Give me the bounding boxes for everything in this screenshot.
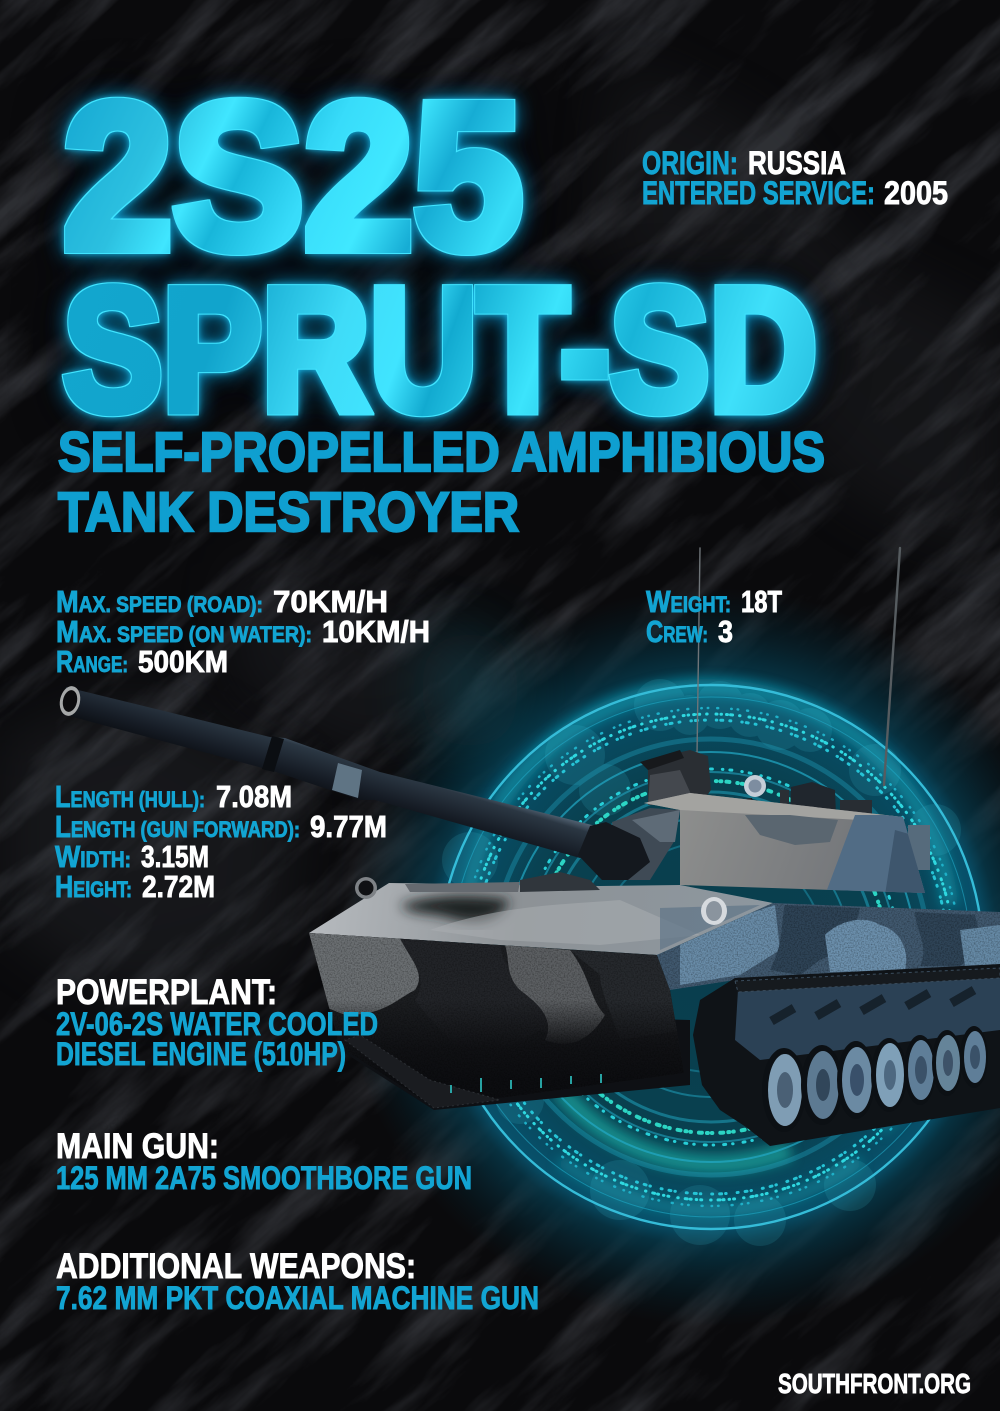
- additional weapons: 7.62 MM PKT COAXIAL MACHINE GUN: [56, 1280, 539, 1316]
- hull front plate with camouflage: [309, 933, 677, 1098]
- bokeh circles: [442, 679, 984, 1246]
- main gun: MAIN GUN:: [56, 1127, 219, 1166]
- weight and crew specs: 18T: [741, 584, 782, 619]
- dimensions specs: 7.08M: [216, 779, 292, 814]
- radar circle glow behind tank: [341, 587, 1000, 1327]
- tank illustration: [57, 548, 1000, 1146]
- powerplant: 2V-06-2S WATER COOLED: [56, 1006, 378, 1042]
- gun mantlet: [578, 822, 650, 880]
- lower hull shadow: [340, 1010, 690, 1110]
- origin and service info: 2005: [884, 175, 948, 211]
- title: 2S25 SPRUT-SD: 2S25: [63, 61, 523, 293]
- powerplant: POWERPLANT:: [56, 973, 277, 1012]
- antennas: [697, 548, 900, 785]
- subtitle: SELF-PROPELLED AMPHIBIOUS: [58, 420, 825, 483]
- weight and crew specs: 3: [718, 614, 733, 649]
- dimensions specs: 9.77M: [310, 809, 387, 844]
- subtitle: TANK DESTROYER: [58, 480, 519, 543]
- concentric rings: [439, 685, 983, 1229]
- title: 2S25 SPRUT-SD: SPRUT-SD: [63, 253, 817, 448]
- rear box: [908, 825, 930, 870]
- blurred teal bands: [467, 687, 955, 1210]
- hull side with camouflage: [657, 903, 1000, 990]
- speed and range specs: MAX. SPEED (ROAD):: [56, 584, 263, 619]
- subtitle: [58, 420, 825, 543]
- weight and crew specs: CREW:: [646, 614, 708, 649]
- additional weapons: ADDITIONAL WEAPONS:: [56, 1247, 416, 1286]
- dimensions specs: LENGTH (GUN FORWARD):: [55, 809, 300, 844]
- teal glints under hull: [450, 1074, 602, 1093]
- speed and range specs: RANGE:: [56, 644, 128, 679]
- dimensions specs: HEIGHT:: [55, 869, 132, 904]
- speed and range specs: 70KM/H: [273, 584, 388, 619]
- main gun: 125 MM 2A75 SMOOTHBORE GUN: [56, 1160, 472, 1196]
- main gun: [56, 1127, 472, 1196]
- road wheels: [762, 1026, 988, 1132]
- dimensions specs: 3.15M: [141, 839, 209, 874]
- gun barrel: [57, 684, 606, 858]
- dimensions specs: WIDTH:: [55, 839, 131, 874]
- speed and range specs: 500KM: [138, 644, 228, 679]
- left track under hull: [345, 1035, 500, 1108]
- origin and service info: ORIGIN:: [642, 145, 738, 181]
- additional weapons: [56, 1247, 539, 1316]
- dotted particle rings: [462, 708, 960, 1206]
- dimensions specs: 2.72M: [142, 869, 215, 904]
- origin and service info: RUSSIA: [748, 145, 846, 181]
- origin and service info: ENTERED SERVICE:: [642, 175, 875, 211]
- dimensions specs: [55, 779, 387, 904]
- speed and range specs: MAX. SPEED (ON WATER):: [56, 614, 312, 649]
- title: 2S25 SPRUT-SD: [63, 61, 817, 448]
- hull deck: [309, 872, 773, 955]
- cupola and roof fittings: [640, 750, 872, 822]
- turret: [612, 793, 930, 900]
- speed and range specs: [56, 584, 430, 679]
- powerplant: DIESEL ENGINE (510HP): [56, 1036, 346, 1072]
- origin and service info: [642, 145, 948, 211]
- weight and crew specs: WEIGHT:: [646, 584, 731, 619]
- weight and crew specs: [646, 584, 782, 649]
- right track assembly: [693, 964, 1000, 1146]
- dimensions specs: LENGTH (HULL):: [55, 779, 205, 814]
- speed and range specs: 10KM/H: [322, 614, 430, 649]
- powerplant: [56, 973, 378, 1072]
